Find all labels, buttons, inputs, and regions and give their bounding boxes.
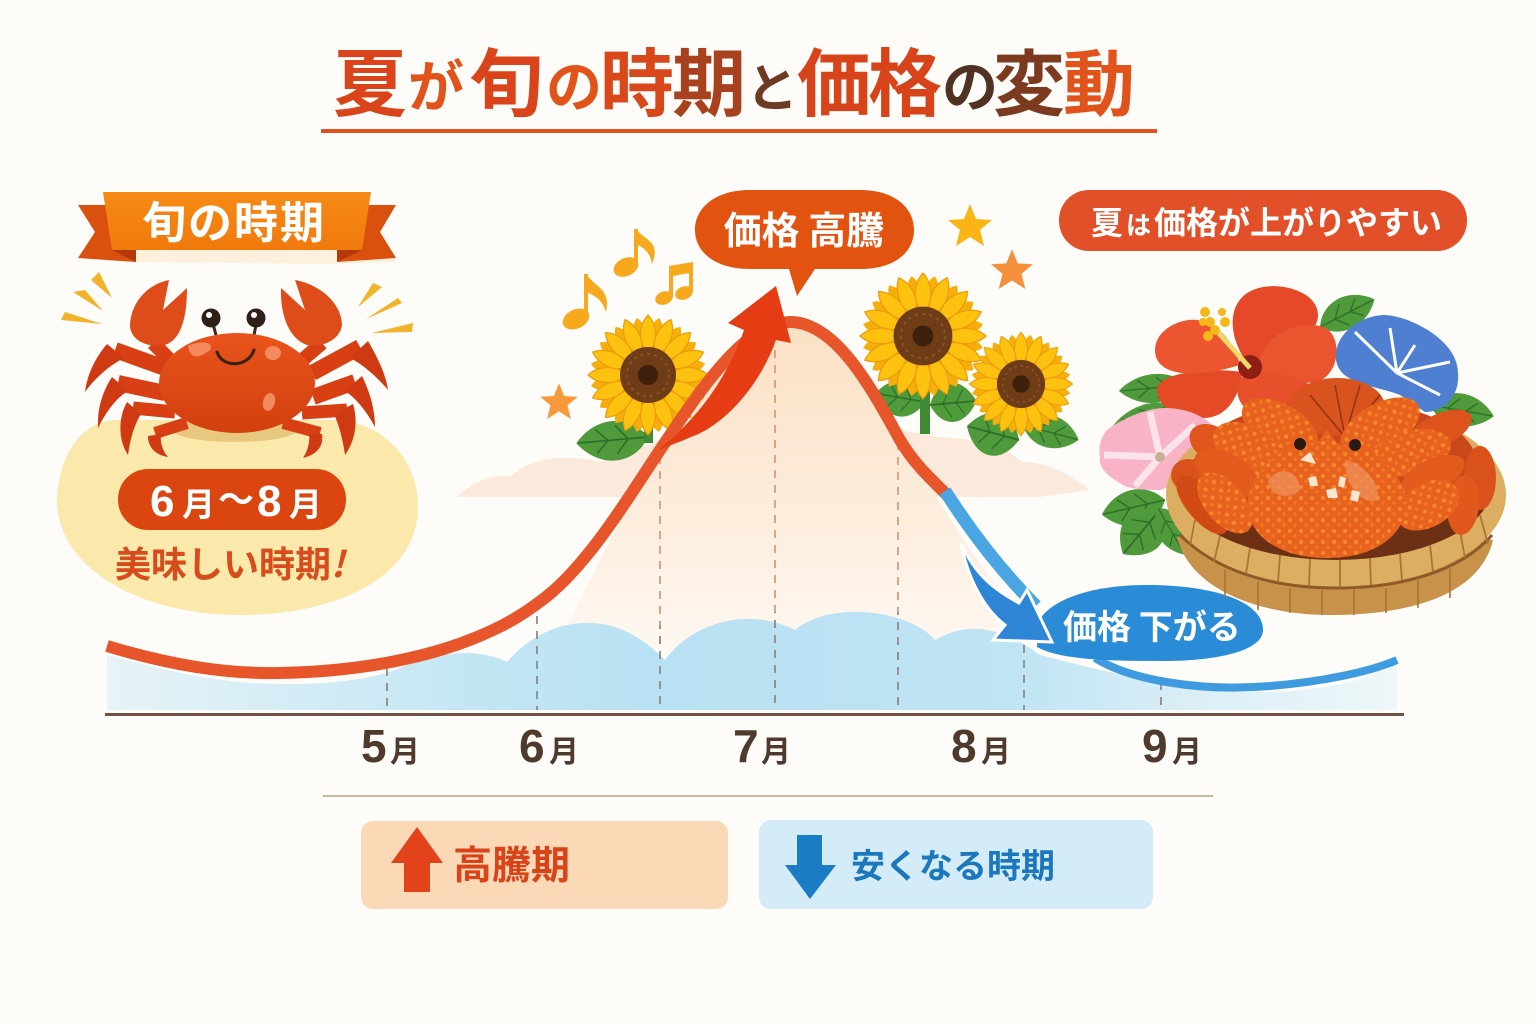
stars xyxy=(540,204,1033,419)
blue falling arrow xyxy=(961,543,1052,642)
ribbon banner: 旬の時期 xyxy=(142,187,326,251)
legend: surge period: 高騰期 xyxy=(453,835,570,891)
water waves xyxy=(107,612,1397,710)
axis xyxy=(105,713,1404,716)
title: 期 xyxy=(672,25,746,132)
pill: June to August: 8 xyxy=(257,477,281,526)
right claw xyxy=(281,280,342,346)
smiling crab xyxy=(85,280,388,458)
star xyxy=(991,249,1033,289)
red rising arrow xyxy=(660,286,791,450)
pill: summer prices rise xyxy=(1059,190,1467,251)
speech bubble: price surge: 価格 高騰 xyxy=(724,200,884,255)
wooden basket xyxy=(1166,403,1506,615)
pink morning glory xyxy=(1099,408,1217,490)
eyes xyxy=(202,308,266,335)
7月: 7 xyxy=(733,720,759,772)
pill: June to August: 〜 xyxy=(218,471,254,523)
pill: price drops xyxy=(1037,585,1263,661)
up arrow icon xyxy=(391,827,443,892)
7月: 月 xyxy=(761,736,791,769)
crab body xyxy=(159,333,315,433)
title xyxy=(333,25,1135,132)
right illustration: crab in basket with flowers xyxy=(1098,284,1506,615)
title: の xyxy=(942,43,998,124)
5月: 月 xyxy=(390,736,420,769)
left claw xyxy=(130,280,187,346)
legend: cheap period: 安くなる時期 xyxy=(851,839,1055,888)
music notes xyxy=(559,228,695,334)
star xyxy=(540,383,578,419)
crab legs xyxy=(1167,378,1496,543)
peach clouds xyxy=(457,430,1090,497)
title: 旬 xyxy=(469,25,543,132)
6月: 6 xyxy=(519,720,545,772)
title underline xyxy=(321,129,1157,133)
right sunflowers xyxy=(860,273,1083,462)
price curve xyxy=(107,322,1397,688)
8月: 8 xyxy=(951,720,977,772)
star xyxy=(948,204,992,246)
left sunflower xyxy=(575,315,708,464)
peach area under curve xyxy=(560,322,1000,650)
title: 格 xyxy=(868,25,942,132)
pill: June to August: 月 xyxy=(182,486,215,523)
note xyxy=(610,228,655,281)
down arrow icon xyxy=(785,835,836,899)
legs xyxy=(115,343,360,433)
title: 時 xyxy=(600,25,674,132)
title: 変 xyxy=(993,26,1065,131)
pill: summer prices rise: 夏 xyxy=(1091,198,1123,244)
yellow blob xyxy=(57,420,418,615)
title: 価 xyxy=(797,25,871,132)
hibiscus xyxy=(1155,286,1337,418)
5月: 5 xyxy=(361,720,387,772)
pill: summer prices rise: は xyxy=(1126,206,1151,242)
burst lines left xyxy=(61,272,112,324)
tasty period text: 美味しい時期! xyxy=(115,536,348,588)
pill: June to August: 6 xyxy=(150,477,174,526)
8月: 月 xyxy=(981,736,1011,769)
blue morning glory xyxy=(1336,315,1458,412)
beamed notes xyxy=(653,262,695,307)
9月: 月 xyxy=(1172,736,1202,769)
crab shell xyxy=(1248,430,1407,558)
title: と xyxy=(746,47,798,122)
pill: summer prices rise: 価格が上がりやすい xyxy=(1154,198,1442,244)
month labels xyxy=(361,720,1202,772)
ribbon banner xyxy=(78,187,396,264)
leg tips xyxy=(85,341,388,458)
leaves xyxy=(1098,284,1497,569)
title: の xyxy=(546,43,602,124)
legend: surge period xyxy=(361,821,728,909)
6月: 月 xyxy=(549,736,579,769)
speech bubble: price surge xyxy=(695,190,914,296)
pill: June to August: 月 xyxy=(289,486,322,523)
title: が xyxy=(408,43,464,124)
title: 動 xyxy=(1063,26,1135,131)
smile xyxy=(217,350,254,364)
note xyxy=(559,273,607,334)
legend: cheap period xyxy=(759,820,1153,909)
9月: 9 xyxy=(1142,720,1168,772)
burst lines right xyxy=(358,283,413,333)
pill: price drops: 価格 下がる xyxy=(1063,600,1241,649)
month guide lines xyxy=(387,350,1161,710)
pill: June to August xyxy=(118,469,346,530)
title: 夏 xyxy=(333,25,407,132)
